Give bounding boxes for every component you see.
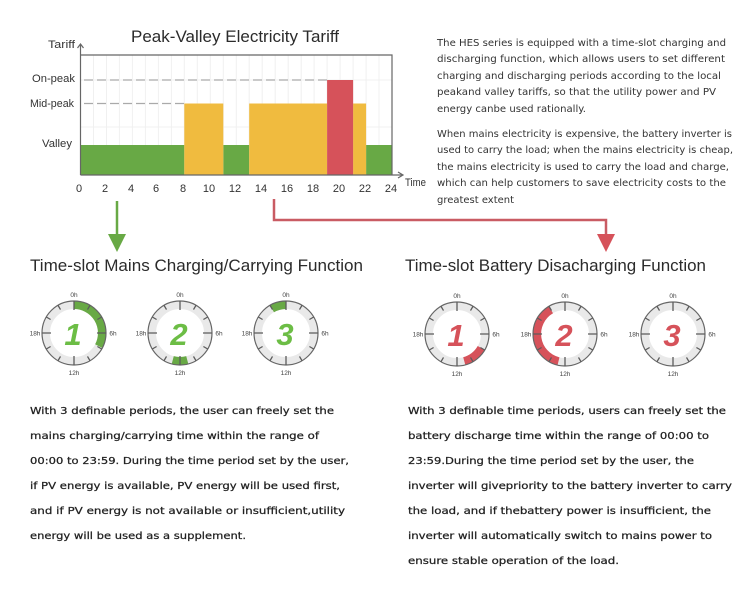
description text block: the mains electricity is used to carry the load and charge, — [437, 162, 729, 173]
clock: green 1: 12h — [69, 370, 80, 377]
y axis labels: Mid-peak — [30, 98, 74, 110]
clock: red 1: 0h — [453, 293, 461, 300]
clock: green 2: 12h — [175, 370, 186, 377]
clock: green 2: 0h — [176, 292, 184, 299]
x axis labels: 12 — [229, 183, 241, 195]
clock: green 2: 18h — [136, 330, 147, 338]
clock: red 2: 18h — [521, 332, 532, 338]
y axis labels: Tariff — [48, 39, 76, 51]
clock: green 1 — [30, 292, 117, 377]
dashed level lines — [84, 80, 327, 104]
description text block — [436, 38, 733, 206]
description text block: The HES series is equipped with a time-slot charging and — [436, 38, 726, 49]
chart grid — [80, 55, 392, 175]
description text block: discharging function, which allows users to set different — [437, 54, 725, 65]
description text block: greatest extent — [437, 195, 514, 206]
arrow: red connector — [274, 199, 615, 252]
text block: mains charging: if PV energy is available, PV energy will be used first, — [30, 481, 340, 492]
clock: red 2: 6h — [600, 332, 608, 338]
clock: red 2: 12h — [560, 371, 571, 378]
x axis labels: 14 — [255, 183, 267, 195]
y axis labels: On-peak — [32, 73, 75, 85]
x axis labels: Time — [405, 177, 426, 189]
x axis labels: 10 — [203, 183, 215, 195]
clock: red 3 — [629, 293, 716, 378]
description text block: peakand valley tariffs, so that the utility power and PV — [437, 87, 717, 98]
clock: green 3: 6h — [321, 330, 329, 338]
x axis labels: 0 — [76, 183, 82, 195]
clock: green 1: 1 — [64, 317, 82, 352]
clock: red 1: 12h — [452, 371, 463, 378]
y axis labels: Valley — [42, 138, 73, 150]
clock: green 2: 2 — [169, 317, 188, 352]
text block: mains charging: and if PV energy is not available or insufficient,utility — [30, 506, 345, 517]
x axis labels: 22 — [359, 183, 371, 195]
clock: red 3: 12h — [668, 371, 679, 378]
text block: battery discharging — [408, 406, 732, 567]
clock: green 2 — [136, 292, 223, 377]
text block: battery discharging: battery discharge time within the range of 00:00 to — [408, 431, 709, 442]
text block: battery discharging: 23:59.During the time period set by the user, the — [408, 456, 694, 467]
title: peak-valley tariff: Peak-Valley Electricity Tariff — [131, 28, 339, 46]
x axis labels: 24 — [385, 183, 397, 195]
clock: red 3: 18h — [629, 332, 640, 338]
text block: battery discharging: inverter will automatically switch to mains power to — [408, 531, 712, 542]
x axis labels: 4 — [128, 183, 134, 195]
clock: red 3: 3 — [663, 318, 681, 353]
text block: mains charging: With 3 definable periods, the user can freely set the — [30, 406, 334, 417]
chart: tariff by hour — [30, 39, 426, 195]
clock: green 3: 18h — [242, 330, 253, 338]
text block: battery discharging: the load, and if thebattery power is insufficient, the — [408, 506, 711, 517]
clock: red 2 — [521, 293, 608, 378]
clock: green 1: 6h — [109, 330, 117, 338]
mid-peak bars — [184, 104, 366, 175]
arrow: green down — [108, 201, 126, 252]
clock: green 1: 18h — [30, 330, 41, 338]
x axis labels: 20 — [333, 183, 345, 195]
description text block: charging and discharging periods according to the local — [437, 71, 721, 82]
clock: green 3 — [242, 292, 329, 377]
y axis labels — [30, 39, 76, 150]
text block: battery discharging: With 3 definable time periods, users can freely set the — [408, 406, 726, 417]
description text block: When mains electricity is expensive, the battery inverter is — [437, 129, 732, 140]
x axis labels: 2 — [102, 183, 108, 195]
clock: red 1: 1 — [447, 318, 465, 353]
description text block: which can help customers to save electricity costs to the — [437, 178, 726, 189]
chart axes — [78, 44, 403, 178]
description text block: energy canbe used rationally. — [437, 104, 586, 115]
clock: red 3: 6h — [708, 332, 716, 338]
x axis labels: 6 — [153, 183, 159, 195]
valley bars — [80, 145, 392, 175]
x axis labels: 16 — [281, 183, 293, 195]
x axis labels: 8 — [180, 183, 186, 195]
x axis labels: 18 — [307, 183, 319, 195]
text block: battery discharging: ensure stable operation of the load. — [408, 556, 619, 567]
clock: red 1: 6h — [492, 332, 500, 338]
x axis labels — [76, 177, 426, 195]
clock: red 1: 18h — [413, 332, 424, 338]
text block: mains charging: energy will be used as a supplement. — [30, 531, 246, 542]
clock: green 2: 6h — [215, 330, 223, 338]
clock: red 1 — [413, 293, 500, 378]
clock: green 3: 0h — [282, 292, 290, 299]
clock: red 2: 2 — [554, 318, 573, 353]
text block: battery discharging: inverter will givepriority to the battery inverter to carry — [408, 481, 732, 492]
text block: mains charging: mains charging/carrying time within the range of — [30, 431, 320, 442]
description text block: used to carry the load; when the mains electricity is cheap, — [437, 145, 733, 156]
on-peak bar — [327, 80, 353, 175]
clock: green 1: 0h — [70, 292, 78, 299]
heading: mains charging: Time-slot Mains Charging/Carrying Function — [30, 257, 363, 275]
clock: red 2: 0h — [561, 293, 569, 300]
clock: red 3: 0h — [669, 293, 677, 300]
text block: mains charging — [30, 406, 349, 542]
clock: green 3: 3 — [276, 317, 294, 352]
text block: mains charging: 00:00 to 23:59. During the time period set by the user, — [30, 456, 349, 467]
heading: battery discharging: Time-slot Battery Disacharging Function — [405, 257, 706, 275]
clock: green 3: 12h — [281, 370, 292, 377]
